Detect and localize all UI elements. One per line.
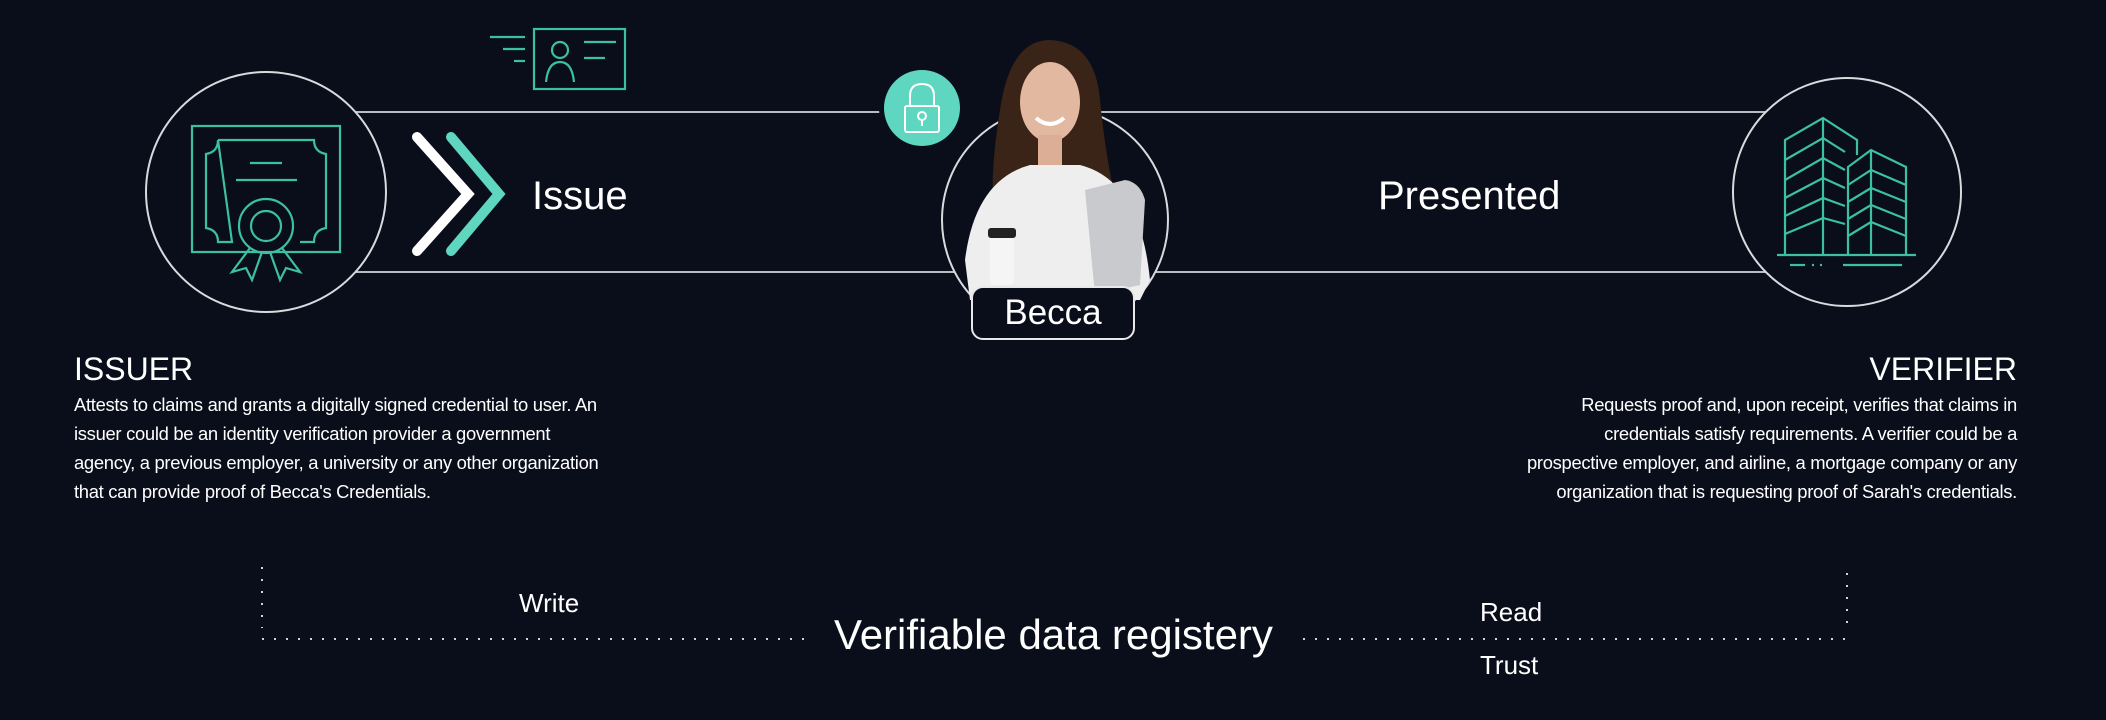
Becca name label: Becca [1004, 293, 1102, 332]
icon: lock circle [879, 65, 965, 151]
VERIFIER heading and text: prospective employer, and airline, a mortgage company or any [1527, 452, 2017, 473]
hair [992, 40, 1130, 260]
VERIFIER heading and text: Requests proof and, upon receipt, verifies that claims in [1581, 394, 2017, 415]
Read label: Read [1480, 597, 1542, 627]
Becca circle with portrait [942, 40, 1168, 333]
ISSUER heading and text: issuer could be an identity verification provider a government [74, 423, 550, 444]
cup [990, 235, 1014, 285]
Issue label: Issue [532, 174, 628, 218]
ISSUER heading and text [74, 351, 598, 502]
VERIFIER heading and text: organization that is requesting proof of Sarah's credentials. [1556, 481, 2017, 502]
issuer circle with certificate icon [146, 72, 386, 312]
Becca name label [971, 286, 1135, 340]
laptop [1085, 180, 1145, 295]
VERIFIER heading and text: credentials satisfy requirements. A verifier could be a [1604, 423, 2017, 444]
connector lines [356, 112, 1765, 272]
face [1020, 62, 1080, 142]
Presented label: Presented [1378, 174, 1560, 218]
ISSUER heading and text: agency, a previous employer, a university or any other organization [74, 452, 598, 473]
ISSUER heading and text: that can provide proof of Becca's Credentials. [74, 481, 431, 502]
dotted registry connectors [262, 567, 1847, 639]
icon: ID card [490, 29, 625, 89]
Write label: Write [519, 588, 579, 618]
VERIFIER heading and text: VERIFIER [1869, 351, 2017, 387]
Trust label: Trust [1480, 650, 1538, 680]
VERIFIER heading and text [1527, 351, 2018, 502]
ISSUER heading and text: Attests to claims and grants a digitally signed credential to user. An [74, 394, 597, 415]
ISSUER heading and text: ISSUER [74, 351, 193, 387]
registry title: Verifiable data registery [834, 611, 1273, 658]
verifier circle with buildings icon [1733, 78, 1961, 306]
body/top [965, 165, 1150, 300]
icon: chevrons arrow [417, 137, 499, 251]
